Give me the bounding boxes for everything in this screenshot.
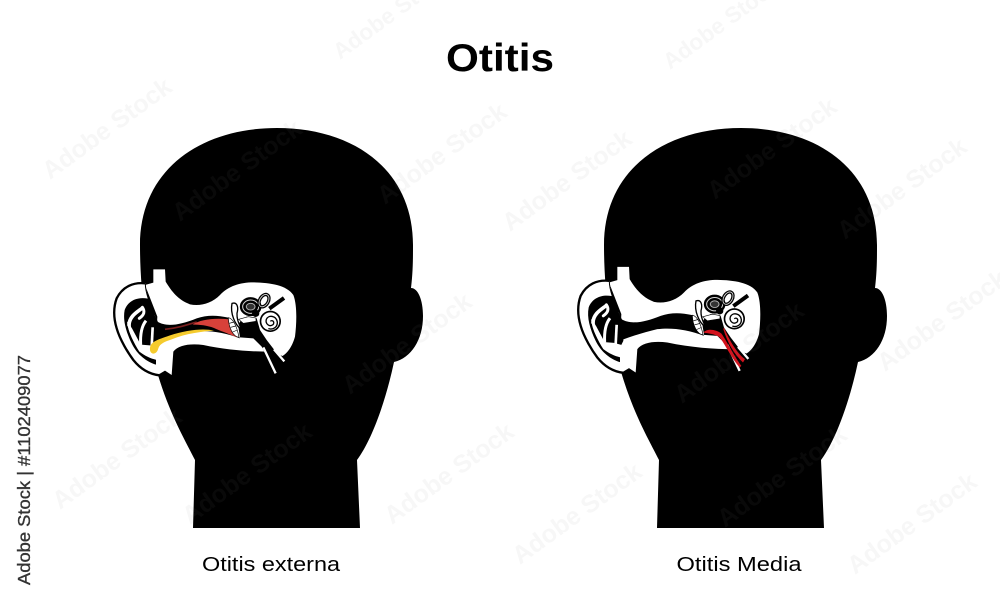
watermarks: Adobe Stock [842, 467, 982, 580]
watermarks: Adobe Stock [372, 97, 512, 210]
watermarks: Adobe Stock [337, 287, 477, 400]
red inflamed tube [703, 330, 741, 367]
watermarks: Adobe Stock [712, 420, 852, 533]
panel: otitis externa [114, 128, 423, 576]
ear anatomy with middle ear inflammation [578, 267, 760, 373]
dark red strip [165, 322, 197, 329]
watermarks: Adobe Stock [832, 132, 972, 245]
ear anatomy with external canal inflammation [114, 269, 296, 375]
yellow discharge [150, 329, 214, 354]
watermarks: Adobe Stock [177, 417, 317, 530]
watermarks: Adobe Stock [47, 402, 187, 515]
watermarks: Adobe Stock [497, 124, 637, 237]
watermarks: Adobe Stock [702, 92, 842, 205]
red inflamed canal [193, 319, 237, 337]
stock id side text: Adobe Stock | #1102409077 [14, 355, 34, 585]
title: Otitis [446, 37, 554, 80]
watermarks: Adobe Stock [167, 114, 307, 227]
label: otitis media: Otitis Media [676, 554, 803, 576]
watermarks: Adobe Stock [507, 457, 647, 570]
watermarks: Adobe Stock [37, 72, 177, 185]
head silhouette right [604, 128, 887, 528]
watermarks: Adobe Stock [669, 296, 809, 409]
label: otitis externa: Otitis externa [202, 554, 341, 576]
watermarks: Adobe Stock [379, 417, 519, 530]
panel: otitis media [578, 128, 887, 576]
head silhouette left [140, 128, 423, 528]
